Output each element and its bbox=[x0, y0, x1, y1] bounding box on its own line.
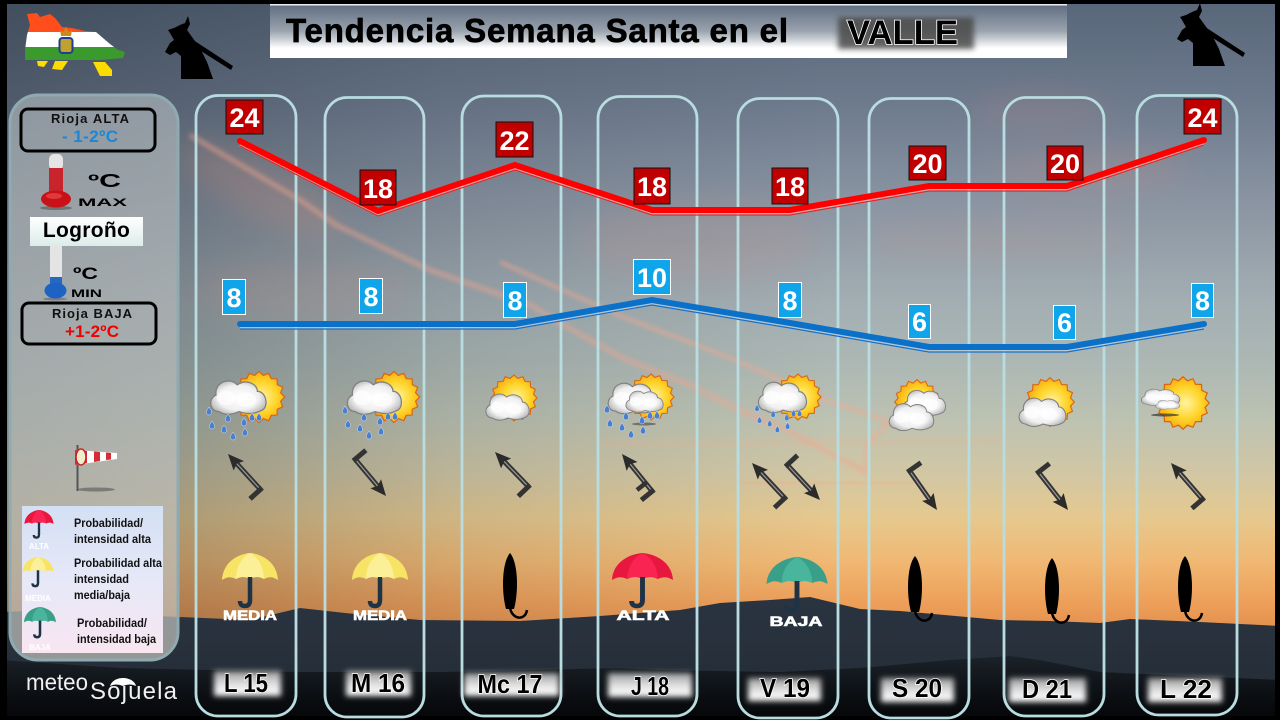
legend: umbrella key bbox=[22, 506, 163, 653]
legend item: low: intensidad baja bbox=[77, 632, 156, 646]
icon: umbrella J 18 alta bbox=[612, 553, 673, 623]
day label V 19: V 19 bbox=[760, 673, 810, 703]
value badges: minimum temperatures: 8 bbox=[226, 283, 242, 313]
panel: day column L 15 bbox=[196, 96, 296, 716]
arrow: wind Mc 17 bbox=[485, 447, 533, 496]
icon: umbrella V 19 baja: BAJA bbox=[770, 613, 822, 629]
arrow: wind L 22 bbox=[1160, 458, 1208, 508]
icon: umbrella L 15 media: MEDIA bbox=[223, 607, 277, 623]
label: Rioja BAJA: Rioja BAJA bbox=[52, 306, 133, 321]
value badges: minimum temperatures: 8 bbox=[1195, 286, 1210, 316]
label: degrees max bbox=[78, 171, 128, 209]
value badges: maximum temperatures: 22 bbox=[499, 126, 530, 156]
legend item: high: ALTA bbox=[29, 542, 49, 551]
icon: penitent silhouette left bbox=[165, 16, 233, 79]
value badges: maximum temperatures: 18 bbox=[363, 174, 393, 204]
icon: weather S 20 clouds and sun bbox=[889, 380, 946, 431]
value badges: minimum temperatures: 8 bbox=[363, 282, 379, 312]
title text: Tendencia Semana Santa en el bbox=[286, 12, 788, 49]
label: degrees max: ºC bbox=[88, 171, 121, 191]
label: Rioja ALTA: - 1-2ºC bbox=[62, 127, 118, 146]
legend item: medium: intensidad bbox=[74, 572, 129, 586]
day label L 22: L 22 bbox=[1160, 674, 1212, 704]
icon: red thermometer bbox=[40, 154, 72, 210]
day label S 20: S 20 bbox=[892, 673, 942, 703]
icon: umbrella M 16 media: MEDIA bbox=[353, 607, 407, 623]
arrow: wind S 20 bbox=[904, 463, 948, 514]
icon: closed umbrella S 20 bbox=[908, 556, 932, 621]
icon: weather M 16 rain, cloud and sun bbox=[342, 371, 420, 439]
value badges: minimum temperatures: 8 bbox=[507, 286, 523, 316]
legend item: low: BAJA bbox=[29, 643, 51, 652]
arrow: wind V 19 first bbox=[742, 458, 790, 508]
legend item: high: intensidad alta bbox=[74, 532, 151, 546]
panel: day column Mc 17 bbox=[462, 96, 561, 716]
value badges: minimum temperatures: 10 bbox=[637, 263, 667, 293]
panel: day column D 21 bbox=[1004, 98, 1104, 716]
logo: meteo Sojuela bbox=[26, 669, 178, 705]
panel: day column J 18 bbox=[598, 96, 697, 716]
legend item: high bbox=[24, 510, 151, 551]
label: degrees max: MAX bbox=[78, 197, 128, 209]
logo: meteo Sojuela: Sojuela bbox=[90, 678, 178, 705]
legend item: medium: MEDIA bbox=[25, 594, 51, 603]
label: degrees min bbox=[71, 264, 102, 300]
value badges: minimum temperatures: 8 bbox=[782, 286, 798, 316]
legend item: low bbox=[24, 607, 156, 652]
icon: penitent silhouette right bbox=[1177, 3, 1245, 66]
value badges: maximum temperatures: 18 bbox=[775, 172, 805, 202]
title banner bbox=[270, 4, 1067, 58]
day label J 18: J 18 bbox=[631, 671, 669, 701]
legend item: medium: media/baja bbox=[74, 588, 130, 602]
label: Logroño: Logroño bbox=[43, 219, 130, 242]
label: degrees min: ºC bbox=[73, 264, 98, 283]
icon: umbrella J 18 alta: ALTA bbox=[616, 607, 670, 623]
icon: closed umbrella L 22 bbox=[1178, 556, 1202, 621]
title tag: VALLE: VALLE bbox=[847, 14, 958, 52]
day label Mc 17: Mc 17 bbox=[478, 669, 542, 699]
value badges: maximum temperatures: 20 bbox=[912, 149, 943, 179]
value badges: maximum temperatures: 24 bbox=[229, 103, 260, 133]
logo: meteo Sojuela: meteo bbox=[26, 669, 88, 695]
value badges: maximum temperatures: 24 bbox=[1187, 103, 1218, 133]
legend item: medium: Probabilidad alta bbox=[74, 556, 162, 570]
icon: umbrella V 19 baja bbox=[766, 557, 828, 629]
value badges: maximum temperatures: 20 bbox=[1050, 149, 1080, 179]
day label M 16: M 16 bbox=[351, 668, 405, 698]
label: Rioja ALTA: Rioja ALTA bbox=[51, 111, 130, 126]
icon: weather L 22 sun with small cloud bbox=[1141, 377, 1209, 429]
icon: closed umbrella D 21 bbox=[1045, 558, 1069, 623]
label: Logroño bbox=[30, 217, 143, 246]
panel: day column V 19 bbox=[738, 98, 838, 718]
arrow: wind L 15 bbox=[218, 449, 266, 499]
value badges: minimum temperatures bbox=[222, 260, 1214, 340]
day label L 15: L 15 bbox=[224, 668, 268, 698]
label: Rioja ALTA bbox=[21, 109, 155, 151]
arrow: wind V 19 second bbox=[782, 455, 830, 505]
label: degrees min: MIN bbox=[71, 288, 102, 300]
panel: day column L 22 bbox=[1137, 96, 1237, 715]
chart: minimum temperature line bbox=[240, 300, 1204, 352]
arrow: wind M 16 bbox=[350, 450, 397, 500]
value badges: minimum temperatures: 6 bbox=[1057, 308, 1072, 338]
arrow: wind J 18 bbox=[611, 450, 658, 500]
arrow: wind D 21 bbox=[1033, 464, 1079, 514]
value badges: maximum temperatures: 18 bbox=[637, 172, 667, 202]
background: mountain silhouettes bbox=[0, 597, 1280, 720]
legend item: high: Probabilidad/ bbox=[74, 516, 144, 530]
icon: windsock bbox=[75, 445, 117, 492]
icon: weather J 18 storm cloud, rain and sun bbox=[604, 374, 674, 438]
panel: legend sidebar bbox=[10, 95, 178, 660]
legend item: medium bbox=[23, 556, 162, 603]
day label J 18 bbox=[608, 671, 692, 701]
day label D 21: D 21 bbox=[1022, 674, 1072, 704]
icon: weather D 21 cloud and sun bbox=[1019, 378, 1074, 426]
icon: weather L 15 rain, cloud and sun bbox=[206, 371, 285, 440]
icon: weather V 19 rain, cloud and sun bbox=[755, 374, 821, 433]
label: Rioja BAJA: +1-2ºC bbox=[65, 322, 119, 341]
icon: weather Mc 17 cloud and sun bbox=[486, 375, 537, 421]
value badges: minimum temperatures: 6 bbox=[912, 307, 927, 337]
icon: closed umbrella Mc 17 bbox=[503, 553, 527, 618]
chart: maximum temperature line bbox=[240, 140, 1204, 216]
panel: day column M 16 bbox=[325, 98, 424, 717]
icon: La Rioja flag map bbox=[25, 13, 125, 76]
icon: blue thermometer bbox=[43, 246, 67, 300]
panel: day column S 20 bbox=[869, 98, 969, 718]
day label L 22 bbox=[1148, 674, 1222, 704]
icon: umbrella M 16 media bbox=[352, 553, 408, 623]
legend item: low: Probabilidad/ bbox=[77, 616, 148, 630]
icon: umbrella L 15 media bbox=[222, 553, 278, 623]
value badges: maximum temperatures bbox=[226, 99, 1221, 205]
label: Rioja BAJA bbox=[22, 303, 156, 344]
